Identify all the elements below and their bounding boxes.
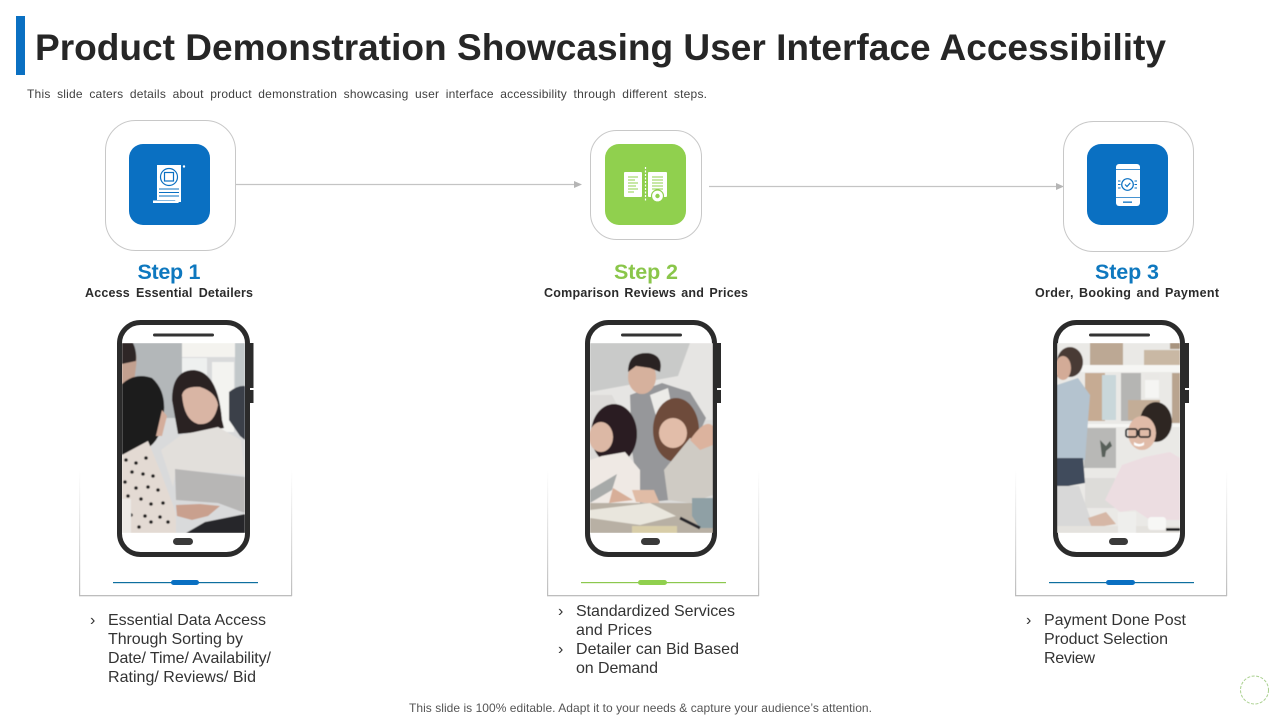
step 1 heading: Step 1 — [138, 260, 201, 284]
step 3 bullets — [1026, 612, 1187, 667]
step 2 bullets: on Demand — [576, 660, 658, 677]
arrow: step 1 to step 2 — [236, 181, 582, 188]
icon: open book — [605, 144, 686, 225]
icon card: step 1 — [106, 120, 236, 250]
step 1 bullets: Through Sorting by — [108, 631, 243, 648]
step 3 column — [1015, 122, 1227, 667]
photo: woman at laptop — [1055, 343, 1180, 533]
subtitle: This slide caters details about product demonstration showcasing user interface accessibility through different steps. — [27, 87, 707, 101]
icon card: step 3 — [1064, 122, 1194, 252]
step 1 bullets: Date/ Time/ Availability/ — [108, 650, 272, 667]
photo: colleagues — [122, 343, 245, 533]
title accent bar — [16, 16, 25, 75]
step 1 phone panel — [79, 470, 292, 596]
photo: three colleagues — [589, 343, 713, 533]
step 2 heading: Step 2 — [614, 260, 678, 284]
step 3 phone panel — [1015, 470, 1227, 596]
step 1 bullets: Essential Data Access — [108, 612, 266, 629]
step 3 bullets: Review — [1044, 650, 1095, 667]
step 1 subheading: Access Essential Detailers — [85, 286, 253, 300]
step 3 bullets: › — [1026, 612, 1031, 629]
icon card: step 2 — [590, 130, 702, 240]
step 3 bullets: Product Selection — [1044, 631, 1168, 648]
step 1 column — [79, 120, 292, 686]
step 2 bullets: and Prices — [576, 622, 652, 639]
step 2 phone panel — [547, 470, 759, 596]
footer note: This slide is 100% editable. Adapt it to your needs & capture your audience’s attention. — [409, 701, 872, 715]
phone with desk photo — [1055, 322, 1189, 554]
step 3 bullets: Payment Done Post — [1044, 612, 1187, 629]
step 2 bullets — [558, 603, 739, 677]
step 2 bullets: › — [558, 641, 563, 658]
step 2 column — [544, 130, 759, 677]
step 1 bullets: Rating/ Reviews/ Bid — [108, 669, 256, 686]
title: Product Demonstration Showcasing User Interface Accessibility — [35, 27, 1166, 68]
arrow: step 2 to step 3 — [709, 183, 1064, 190]
icon: smartphone with check — [1087, 144, 1168, 225]
step 1 bullets — [90, 612, 272, 686]
step 3 heading: Step 3 — [1095, 260, 1159, 284]
step 2 bullets: Standardized Services — [576, 603, 735, 620]
step 3 subheading: Order, Booking and Payment — [1035, 286, 1220, 300]
phone with office photo — [120, 322, 254, 554]
icon: document with badge — [129, 144, 210, 225]
step 1 bullets: › — [90, 612, 95, 629]
phone with team photo — [588, 322, 721, 554]
step 2 subheading: Comparison Reviews and Prices — [544, 286, 748, 300]
dashed circle mark — [1240, 676, 1268, 704]
step 2 bullets: Detailer can Bid Based — [576, 641, 739, 658]
step 2 bullets: › — [558, 603, 563, 620]
